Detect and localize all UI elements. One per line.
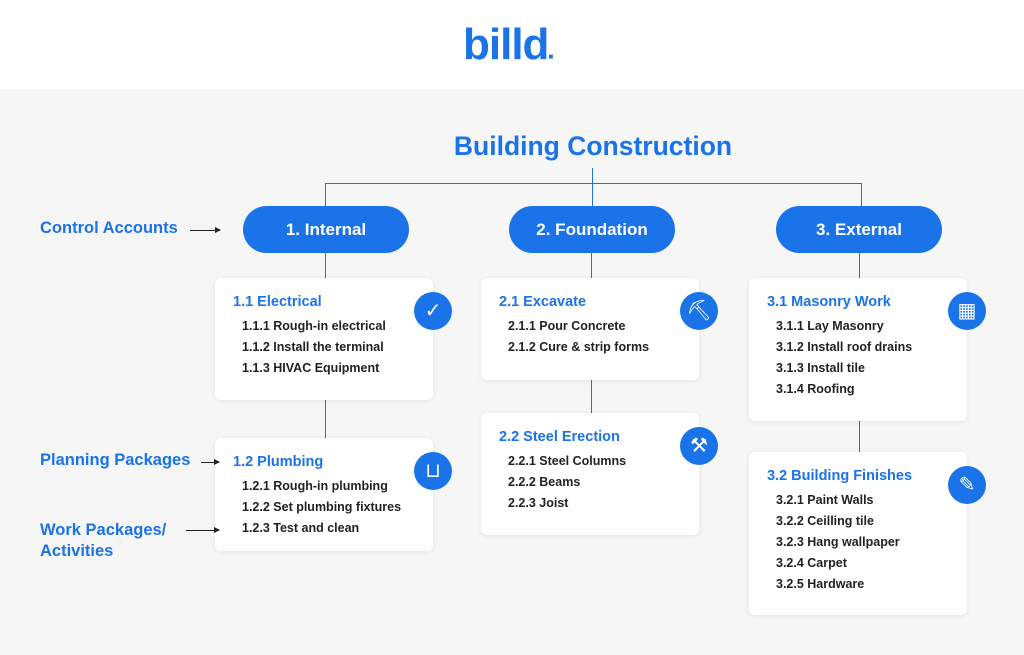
icon: pipe: ⊔	[425, 460, 441, 482]
icon: crane: ⚒	[690, 435, 708, 457]
box: plumbing: 1.2.1 Rough-in plumbing	[242, 479, 388, 493]
box: electrical: 1.1.3 HIVAC Equipment	[242, 361, 379, 375]
icon: wheelbarrow: ⛏	[686, 300, 712, 322]
box: steel: 2.2 Steel Erection	[499, 429, 620, 445]
box: steel	[481, 413, 699, 535]
box: electrical	[215, 278, 433, 400]
box: excavate	[481, 278, 699, 380]
box: plumbing	[215, 438, 433, 551]
icon: bulb	[414, 292, 452, 330]
box: masonry: 3.1.1 Lay Masonry	[776, 319, 884, 333]
pill: external: 3. External	[816, 220, 902, 239]
icon: crane	[680, 427, 718, 465]
box: finishes	[749, 452, 967, 615]
box: finishes: 3.2.4 Carpet	[776, 556, 847, 570]
box: plumbing: 1.2.3 Test and clean	[242, 521, 359, 535]
box: electrical: 1.1.1 Rough-in electrical	[242, 319, 386, 333]
box: excavate: 2.1.1 Pour Concrete	[508, 319, 625, 333]
box: steel: 2.2.2 Beams	[508, 475, 580, 489]
box: plumbing: 1.2 Plumbing	[233, 454, 323, 470]
box: electrical: 1.1 Electrical	[233, 294, 322, 310]
box: steel: 2.2.3 Joist	[508, 496, 568, 510]
icon: wheelbarrow	[680, 292, 718, 330]
icon: bricks	[948, 292, 986, 330]
label: work packages	[40, 521, 166, 560]
pill: external	[776, 206, 942, 253]
logo: billd■	[463, 20, 552, 69]
box: finishes: 3.2.3 Hang wallpaper	[776, 535, 900, 549]
label: work packages: Activities	[40, 542, 113, 560]
icon: bricks: ▦	[958, 300, 976, 322]
pill: internal: 1. Internal	[286, 220, 366, 239]
label: control accounts: Control Accounts	[40, 219, 178, 237]
header	[0, 0, 1024, 89]
icon: brush	[948, 466, 986, 504]
title: Building Construction	[454, 131, 732, 161]
box: finishes: 3.2.1 Paint Walls	[776, 493, 874, 507]
box: electrical: 1.1.2 Install the terminal	[242, 340, 384, 354]
box: masonry: 3.1.3 Install tile	[776, 361, 865, 375]
pill: internal	[243, 206, 409, 253]
icon: brush: ✎	[959, 474, 975, 496]
label: work packages: Work Packages/	[40, 521, 166, 539]
arrow: control	[190, 230, 220, 231]
box: excavate: 2.1.2 Cure & strip forms	[508, 340, 649, 354]
pill: foundation	[509, 206, 675, 253]
box: masonry	[749, 278, 967, 421]
label: planning packages: Planning Packages	[40, 451, 190, 469]
box: steel: 2.2.1 Steel Columns	[508, 454, 626, 468]
box: masonry: 3.1.4 Roofing	[776, 382, 854, 396]
arrow: planning	[201, 462, 219, 463]
pill: foundation: 2. Foundation	[536, 220, 648, 239]
box: finishes: 3.2 Building Finishes	[767, 468, 912, 484]
arrow: work	[186, 530, 219, 531]
box: masonry: 3.1.2 Install roof drains	[776, 340, 912, 354]
icon: pipe	[414, 452, 452, 490]
box: finishes: 3.2.5 Hardware	[776, 577, 864, 591]
box: excavate: 2.1 Excavate	[499, 294, 586, 310]
box: finishes: 3.2.2 Ceilling tile	[776, 514, 874, 528]
box: masonry: 3.1 Masonry Work	[767, 294, 891, 310]
icon: bulb: ✓	[425, 300, 441, 322]
box: plumbing: 1.2.2 Set plumbing fixtures	[242, 500, 401, 514]
